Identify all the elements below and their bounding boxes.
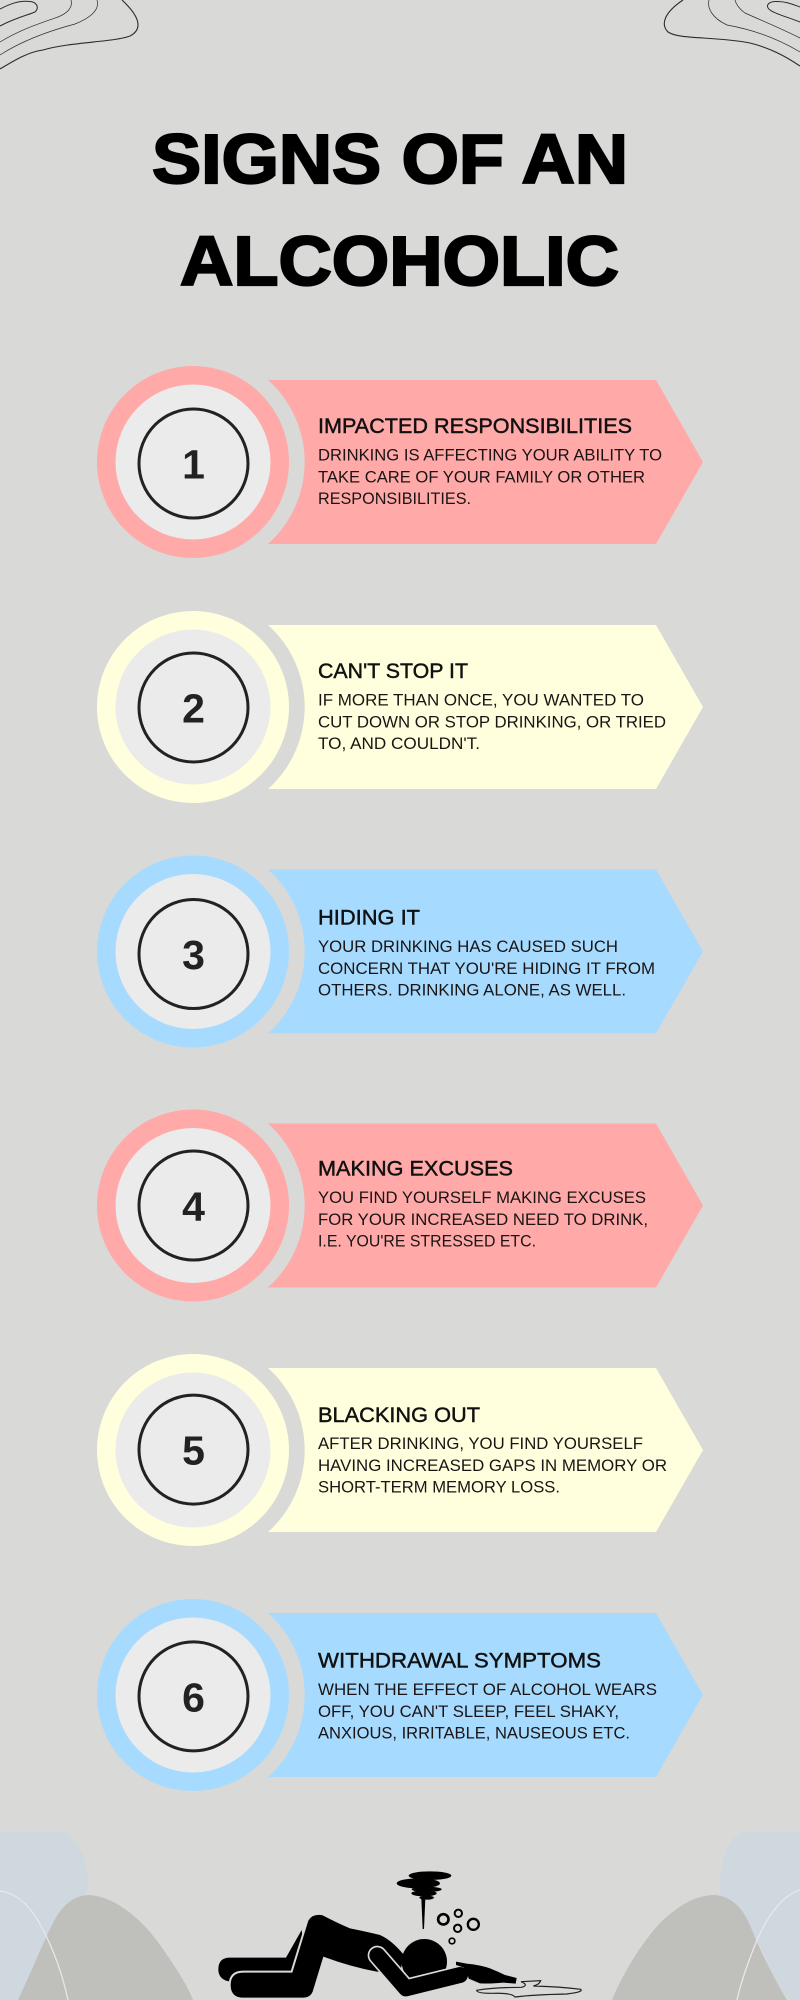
text block: HIDING IT [318, 906, 420, 930]
decoration: top right contour lines [664, 0, 800, 66]
panel: sign 6 withdrawal symptoms [97, 1599, 703, 1791]
text block: IF MORE THAN ONCE, YOU WANTED TO [318, 692, 644, 710]
panel: sign 1 impacted responsibilities [97, 366, 703, 558]
arrow banner [268, 1124, 703, 1288]
text block: HAVING INCREASED GAPS IN MEMORY OR [318, 1457, 667, 1475]
text block: SHORT-TERM MEMORY LOSS. [318, 1478, 560, 1496]
text block: AFTER DRINKING, YOU FIND YOURSELF [318, 1435, 643, 1453]
number badge 2: 2 [182, 686, 205, 732]
bottle [456, 1962, 517, 1984]
text block: CONCERN THAT YOU'RE HIDING IT FROM [318, 960, 655, 978]
text block: TO, AND COULDN'T. [318, 735, 480, 753]
arrow banner [268, 625, 703, 789]
spilled puddle [477, 1981, 581, 1997]
panel: sign 3 hiding it [97, 856, 703, 1048]
number badge 4 [97, 1110, 289, 1302]
text block: I.E. YOU'RE STRESSED ETC. [318, 1232, 536, 1250]
dizzy bubbles [438, 1910, 479, 1944]
text block: TAKE CARE OF YOUR FAMILY OR OTHER [318, 468, 645, 486]
text block: ANXIOUS, IRRITABLE, NAUSEOUS ETC. [318, 1724, 630, 1742]
arrow banner [268, 1613, 703, 1777]
panel: sign 4 making excuses [97, 1110, 703, 1302]
number badge 3 [97, 856, 289, 1048]
text block [318, 906, 655, 1000]
number badge 6: 6 [182, 1674, 205, 1720]
icon: collapsed drunk figure with bottle [218, 1871, 581, 1998]
title: SIGNS OF AN [152, 120, 628, 198]
arrow banner [268, 380, 703, 544]
head [402, 1939, 447, 1984]
title: ALCOHOLIC [180, 222, 619, 300]
decoration: top left contour lines [0, 0, 138, 69]
number badge 2 [97, 611, 289, 803]
number badge 1 [97, 366, 289, 558]
decoration: bottom left shapes [0, 1832, 193, 2000]
panel: sign 5 blacking out [97, 1354, 703, 1546]
number badge 5 [97, 1354, 289, 1546]
smoke swirl [397, 1871, 451, 1929]
text block: CAN'T STOP IT [318, 660, 468, 683]
number badge 1: 1 [182, 442, 205, 488]
arrow banner [268, 870, 703, 1034]
text block [318, 1650, 657, 1742]
number badge 6 [97, 1599, 289, 1791]
text block: YOU FIND YOURSELF MAKING EXCUSES [318, 1189, 646, 1207]
arrow banner [268, 1368, 703, 1532]
text block: FOR YOUR INCREASED NEED TO DRINK, [318, 1211, 648, 1229]
panel: sign 2 can't stop it [97, 611, 703, 803]
title [152, 120, 628, 300]
text block: DRINKING IS AFFECTING YOUR ABILITY TO [318, 446, 662, 464]
number badge 4: 4 [182, 1184, 205, 1230]
text block: RESPONSIBILITIES. [318, 490, 471, 508]
text block [318, 1158, 648, 1250]
text block [318, 660, 666, 753]
text block: IMPACTED RESPONSIBILITIES [318, 415, 632, 438]
text block: BLACKING OUT [318, 1404, 480, 1427]
text block: OFF, YOU CAN'T SLEEP, FEEL SHAKY, [318, 1703, 619, 1721]
text block: CUT DOWN OR STOP DRINKING, OR TRIED [318, 714, 666, 732]
number badge 5: 5 [182, 1428, 205, 1474]
text block [318, 1404, 667, 1496]
decoration: bottom right shapes [612, 1832, 800, 2000]
number badge 3: 3 [182, 932, 205, 978]
arm [377, 1955, 460, 1988]
back leg [218, 1930, 304, 1982]
text block: OTHERS. DRINKING ALONE, AS WELL. [318, 982, 626, 1000]
text block: YOUR DRINKING HAS CAUSED SUCH [318, 938, 618, 956]
text block: WITHDRAWAL SYMPTOMS [318, 1650, 601, 1672]
text block [318, 415, 662, 508]
text block: MAKING EXCUSES [318, 1158, 513, 1180]
body and front leg [231, 1915, 404, 1998]
text block: WHEN THE EFFECT OF ALCOHOL WEARS [318, 1681, 657, 1699]
